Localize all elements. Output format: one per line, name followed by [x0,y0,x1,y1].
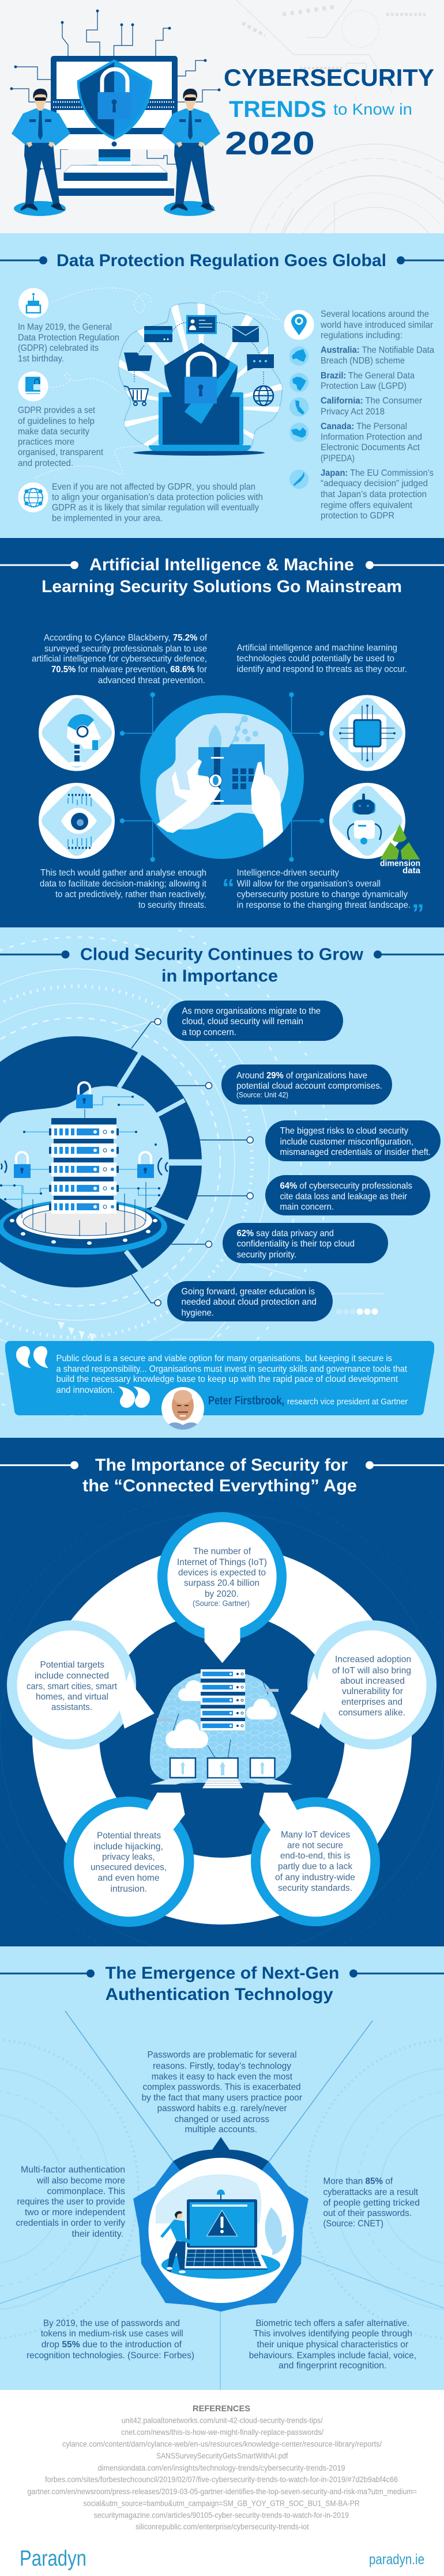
text: Australia: Australia: The Notifiable Data [321,346,434,355]
text: GDPR guidelines [18,406,104,468]
text: AI identifies threats: identify and respond to threats as they occur. [237,664,407,674]
illustration: hands unlocking folder [140,695,304,859]
text: California: Privacy Act 2018 [321,407,385,417]
white ring [66,1579,378,1891]
text: passwords problematic: by the fact that many users practice poor [142,2093,303,2103]
heading: connected everything [0,1456,444,1495]
icon: Brazil [289,373,308,392]
icon: people globe [18,483,48,513]
bubble: increased vulnerability: about increased [340,1676,405,1686]
text: Japan: that Japan’s data protection [321,490,427,499]
text: Cylance survey stats: artificial intelligence for cybersecurity defence, [32,654,207,664]
text: biometric tech: behaviours. Examples include facial, voice, [249,2351,416,2361]
panel: references: cylance.com/content/dam/cylance-web/en-us/resources/knowledge-center/resource-library/reports/ [62,2440,382,2449]
bubble: IoT device count: by 2020. [205,1589,239,1599]
text: gather and analyse data: to security threats. [138,900,206,910]
text: 85% of cyberattacks [323,2177,420,2229]
logo: dimension data [380,824,421,876]
bubble: not secure end-to-end [251,1793,380,1926]
pill 5 with connector: security priority. [237,1250,296,1260]
pill 3 with connector: The biggest risks to cloud security [280,1126,408,1136]
text: Japan [321,468,434,521]
pill 4 with connector: main concern. [280,1202,334,1212]
text: Canada [321,422,422,463]
text: Australia: Breach (NDB) scheme [321,356,405,366]
text: passwords problematic: Passwords are problematic for several [148,2050,296,2060]
quote: intelligence-driven security: cybersecurity posture to change dynamically [237,889,408,900]
text: passwords and tokens drop: tokens in medium-risk use cases will [41,2329,183,2339]
bubble: potential targets: include connected [35,1671,109,1681]
heading: data protection: Data Protection Regulation Goes Global [57,251,386,270]
title: to Know in [333,100,412,118]
text: passwords problematic [142,2050,303,2135]
text: Cylance survey stats: 70.5% for malware prevention, 68.6% for [51,665,208,675]
bubble: increased vulnerability: Increased adoption [335,1655,411,1665]
logo: dimension data: data [402,866,421,876]
attribution: Peter Firstbrook, [208,1395,284,1407]
text: GDPR birthday [18,323,119,364]
text: plan for GDPR: Even if you are not affected by GDPR, you should plan [52,482,255,492]
text: passwords problematic: changed or used across [174,2115,269,2124]
text: similar regulations intro [320,309,434,340]
text: passwords and tokens drop: recognition technologies. (Source: Forbes) [27,2351,194,2361]
bubble: potential targets: cars, smart cities, smart [27,1682,118,1691]
text: Cylance survey stats: advanced threat prevention. [98,676,205,685]
text: GDPR guidelines: and protected. [18,459,73,468]
text: Canada: (PIPEDA) [321,454,355,463]
illustration: shield with padlock [51,59,178,146]
bubble: not secure end-to-end: end-to-end, this is [280,1851,351,1861]
heading: connected everything: the “Connected Everything” Age [82,1476,357,1495]
callout: Gartner quote: a shared responsibility... Organisations must invest in security skills and governance tools that [57,1365,408,1374]
illustration: cloud server with padlocks [0,1036,202,1287]
text: 85% of cyberattacks: cyberattacks are a result [323,2188,419,2198]
heading: AI and ML: Learning Security Solutions Go Mainstream [42,577,402,596]
illustration: security badge with laptop warning [133,2137,308,2312]
icon: location pin [284,310,314,340]
text: GDPR guidelines: of guidelines to help [18,416,95,426]
pill 5 with connector: confidentiality is their top cloud [237,1239,355,1249]
heading: next-gen authentication [0,1964,444,2004]
text: Cylance survey stats [32,633,208,685]
panel: references: dimensiondata.com/en/insights/technology-trends/cybersecurity-trends-2019 [98,2464,345,2472]
callout: Gartner quote: Public cloud is a secure and viable option for many organisations, but keeping it secure is [57,1354,392,1363]
pill 1 with connector: As more organisations migrate to the [182,1006,321,1016]
text: AI identifies threats [237,643,407,674]
panel: references: gartner.com/en/newsroom/press-releases/2019-03-05-gartner-identifies-the-top-seven-security-and-risk-ma?utm_medium= [28,2487,417,2496]
text: passwords and tokens drop: drop 55% due to the introduction of [42,2340,182,2350]
bubble: increased vulnerability [290,1620,437,1749]
pill 1 with connector: a top concern. [182,1028,236,1037]
text: gather and analyse data: to act predictively, rather than reactively, [55,889,206,900]
icon: AI head [39,695,115,771]
text: 85% of cyberattacks: More than 85% of [323,2177,393,2187]
text: GDPR guidelines: practices more [18,437,74,447]
panel: next-gen authentication [0,1964,444,2390]
bubble: increased vulnerability: of IoT will also bring [332,1666,411,1676]
panel: AI and machine learning [0,555,444,927]
pill 6 with connector: needed about cloud protection and [181,1297,317,1307]
text: Cylance survey stats: According to Cylance Blackberry, 75.2% of [44,633,208,643]
text: biometric tech [249,2319,416,2371]
bubble: IoT device count: surpass 20.4 billion [184,1578,259,1588]
pill 2 with connector: (Source: Unit 42) [236,1090,288,1099]
text: plan for GDPR: to align your organisation’s data protection policies with [52,493,263,502]
text: GDPR guidelines: make data security [18,427,89,437]
bubble: potential threats: include hijacking, [93,1842,163,1851]
illustration: laptop with shield and data icons [118,302,283,456]
text: passwords and tokens drop: By 2019, the use of passwords and [43,2319,180,2328]
pill 5 with connector [171,1223,388,1263]
bubble: potential threats: Potential threats [97,1831,161,1841]
text: multi-factor authentication [16,2165,126,2239]
panel: data protection regulation [0,251,444,523]
panel: references: unit42.paloaltonetworks.com/unit-42-cloud-security-trends-tips/ [122,2416,323,2425]
bubble: IoT device count: devices is expected to [178,1568,266,1578]
title: 2020 [225,125,315,162]
bubble: not secure end-to-end: Many IoT devices [281,1830,350,1840]
pill 2 with connector: Around 29% of organizations have [236,1071,367,1081]
spoke lines [0,2011,444,2390]
heading: cloud security: Cloud Security Continues to Grow [80,945,364,964]
text: Australia [321,346,434,366]
text: biometric tech: their unique physical characteristics or [257,2340,409,2350]
text: GDPR guidelines: organised, transparent [18,448,104,457]
quote: intelligence-driven security: in response to the changing threat landscape. [237,900,411,910]
illustration: right guard [161,89,220,216]
text: Cylance survey stats: surveyed security professionals plan to use [44,644,207,654]
bubble: IoT device count [157,1512,287,1663]
pill 6 with connector: hygiene. [181,1308,214,1318]
heading: AI and ML: Artificial Intelligence & Machine [89,555,354,574]
text: passwords problematic: multiple accounts. [185,2125,257,2135]
attribution: research vice president at Gartner [287,1397,408,1407]
quote: intelligence-driven security: “ [222,874,235,902]
pill 6 with connector [131,1275,333,1321]
icon: California [289,397,308,416]
heading: cloud security: in Importance [161,967,278,986]
text: 85% of cyberattacks: out of their passwords. [323,2208,412,2218]
text: similar regulations intro: Several locations around the [321,309,429,319]
text: passwords problematic: makes it easy to hack even the most [152,2072,293,2082]
text: multi-factor authentication: Multi-factor authentication [21,2165,125,2175]
heading: cloud security [0,945,444,986]
text: Canada: Electronic Documents Act [321,443,420,453]
illustration: circuit wires [10,9,220,171]
text: passwords and tokens drop [27,2319,194,2361]
text: Japan: “adequacy decision” judged [321,479,428,488]
panel: references: REFERENCES [193,2404,250,2414]
text: biometric tech: This involves identifying people through [254,2329,412,2339]
text: 85% of cyberattacks: of people getting tricked [323,2198,420,2208]
panel: references: SANSSurveySecurityGetsSmartWithAI.pdf [156,2452,288,2460]
text: AI identifies threats: Artificial intelligence and machine learning [237,643,397,653]
pill 1 with connector: cloud, cloud security will remain [182,1017,303,1026]
connectors [120,692,324,862]
title: CYBERSECURITY [224,64,434,91]
text: California: California: The Consumer [321,396,423,406]
logo: dimension data: dimension [380,858,420,869]
callout: Gartner quote [5,1341,434,1431]
text: similar regulations intro: world have introduced similar [320,320,434,330]
text: multi-factor authentication: requires the user to provide [17,2197,125,2207]
quote: intelligence-driven security: Intelligence-driven security [237,868,339,878]
quote: intelligence-driven security: Will allow for the organisation’s overall [237,879,381,889]
text: Japan: Japan: The EU Commission’s [321,468,434,478]
illustration: monitor [51,56,178,196]
icon: microchip [329,695,406,771]
panel: cloud security [0,908,444,1431]
text: multi-factor authentication: commonplace. This [47,2187,125,2196]
icon: cyber eye [39,783,115,859]
heading: next-gen authentication: Authentication Technology [106,1985,333,2004]
bubble: potential threats: intrusion. [111,1884,147,1894]
text: GDPR birthday: In May 2019, the General [18,323,112,332]
pill 6 with connector: Going forward, greater education is [181,1287,315,1297]
panel: references: forbes.com/sites/forbestechcouncil/2019/02/07/five-cybersecurity-trends-to-watch-for-in-2019/#7d2b9abf4c66 [45,2475,398,2484]
pill 2 with connector: potential cloud account compromises. [236,1081,382,1091]
text: multi-factor authentication: their identity. [72,2229,123,2239]
pill 3 with connector [199,1120,441,1161]
icon: guideline book [18,372,48,401]
bubble: IoT device count: Internet of Things (IoT) [177,1558,267,1567]
text: Brazil: Protection Law (LGPD) [321,381,407,391]
text: Canada: Canada: The Personal [321,422,407,431]
icon: Japan [289,469,308,489]
text: Canada: Information Protection and [321,433,422,442]
quote: intelligence-driven security: ” [412,899,424,927]
text: passwords problematic: password habits e.g. rarely/never [157,2104,287,2113]
text: gather and analyse data [40,868,207,910]
text: gather and analyse data: data to facilitate decision-making; allowing it [40,879,207,889]
text: Brazil [321,371,415,391]
text: multi-factor authentication: will also become more [36,2176,125,2186]
text: Brazil: Brazil: The General Data [321,371,415,381]
link: paradyn.ie: paradyn.ie [369,2552,424,2568]
illustration: left guard [12,89,70,216]
pill 4 with connector: 64% of cybersecurity professionals [280,1181,412,1191]
text: multi-factor authentication: two or more independent [25,2208,126,2218]
heading: AI and ML [0,555,444,596]
text: AI identifies threats: technologies could potentially be used to [237,654,394,664]
text: passwords problematic: reasons. Firstly, today’s technology [153,2062,291,2071]
text: passwords problematic: complex passwords. This is exacerbated [143,2082,301,2092]
attribution [208,1395,408,1407]
text: California [321,396,423,417]
panel: references [28,2404,417,2531]
text: plan for GDPR: be implemented in your area. [52,514,163,523]
bubble: increased vulnerability: enterprises and [341,1698,402,1707]
bubble: IoT device count: (Source: Gartner) [193,1599,250,1608]
text: Japan: protection to GDPR [321,511,394,521]
bubble: increased vulnerability: vulnerability for [342,1687,404,1696]
callout: Gartner quote: build the necessary knowledge base to keep up with the rapid pace of cloud development [57,1374,398,1384]
pill 3 with connector: mismanaged credentials or insider theft. [280,1147,431,1157]
bubble: potential targets [7,1620,155,1749]
bubble: potential threats: unsecured devices, [91,1863,167,1873]
text: multi-factor authentication: credentials in order to verify [16,2218,125,2228]
bubble: IoT device count: The number of [193,1547,251,1556]
text: plan for GDPR [52,482,263,523]
bubble: increased vulnerability: consumers alike. [338,1708,405,1718]
pill 5 with connector: 62% say data privacy and [237,1229,334,1238]
quote: intelligence-driven security [222,868,424,927]
illustration: hex cloud server and laptops [150,1669,293,1788]
text: Japan: regime offers equivalent [321,501,413,510]
panel: references: securitymagazine.com/articles/90105-cyber-security-trends-to-watch-for-in-2019 [94,2511,349,2520]
title: TRENDS [229,97,326,122]
text: biometric tech: and fingerprint recognition. [279,2361,386,2371]
text: GDPR birthday: Data Protection Regulation [18,333,119,343]
panel: references: social&utm_source=bambu&utm_campaign=SM_GB_YOY_GTR_SOC_BU1_SM-BA-PR [83,2499,360,2508]
icon: birthday cake [18,288,48,318]
icon: robot [329,783,405,859]
portrait: Peter Firstbrook [161,1387,204,1431]
bubble: potential targets: assistants. [51,1703,92,1713]
bubble: not secure end-to-end: are not secure [287,1841,343,1851]
text: GDPR birthday: 1st birthday. [18,354,64,364]
icon: closing quote mark [118,1387,150,1408]
panel: connected everything [0,1456,444,1977]
bubble: not secure end-to-end: of any industry-wide [275,1873,355,1882]
logo: Paradyn: Paradyn [20,2547,86,2571]
icon: Australia [289,346,308,366]
title [224,64,434,162]
bubble: potential targets: homes, and virtual [36,1692,108,1702]
heading: connected everything: The Importance of Security for [95,1456,348,1475]
text: 85% of cyberattacks: (Source: CNET) [323,2219,383,2229]
pill 4 with connector [196,1175,430,1215]
heading: next-gen authentication: The Emergence of Next-Gen [106,1964,339,1983]
bubble: potential threats: and even home [98,1873,160,1883]
callout: Gartner quote: and innovation. [57,1385,115,1395]
icon: Canada [289,423,308,442]
text: plan for GDPR: GDPR as it is likely that similar regulation will eventually [52,503,259,513]
bubble: potential threats: privacy leaks, [102,1853,155,1862]
text: similar regulations intro: regulations including: [321,331,402,340]
pill 2 with connector [176,1065,392,1105]
bubble: potential targets: Potential targets [40,1660,104,1670]
header panel [10,0,444,233]
panel: references: cnet.com/news/this-is-how-we-might-finally-replace-passwords/ [121,2428,323,2437]
text: biometric tech: Biometric tech offers a safer alternative. [256,2319,409,2328]
bubble: not secure end-to-end: partly due to a lack [278,1862,353,1872]
pill 1 with connector [131,1001,343,1048]
pill 3 with connector: include customer misconfiguration, [280,1137,413,1147]
bubble: not secure end-to-end: security standards. [278,1883,352,1893]
text: gather and analyse data: This tech would gather and analyse enough [40,868,206,878]
pill 4 with connector: cite data loss and leakage as their [280,1192,408,1202]
panel: references: siliconrepublic.com/enterprise/cybersecurity-trends-iot [136,2522,309,2531]
icon: opening quote mark [16,1346,48,1368]
text: GDPR guidelines: GDPR provides a set [18,406,95,415]
text: GDPR birthday: (GDPR) celebrated its [18,343,99,353]
bubble: potential threats [63,1793,194,1927]
